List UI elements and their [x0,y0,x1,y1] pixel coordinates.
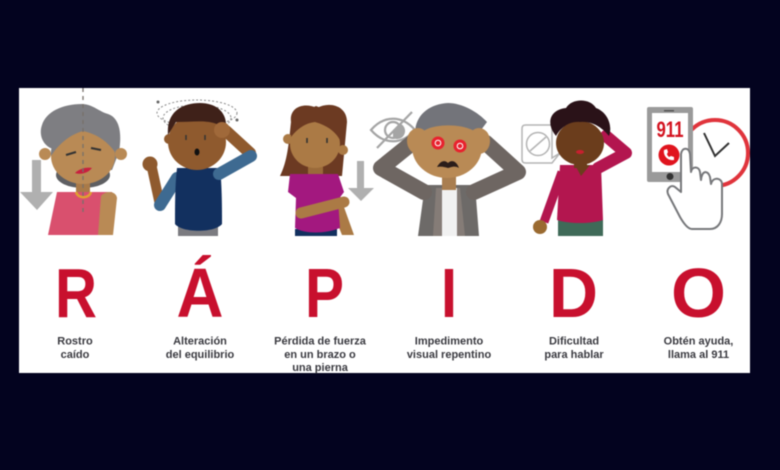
caption: Alteración del equilibrio: del equilibrio [166,349,235,361]
caption: Dificultad para hablar: para hablar [544,349,604,361]
icon: down arrow [348,161,374,201]
caption: Pérdida de fuerza: Pérdida de fuerza [274,336,367,348]
letter P: P [305,254,344,332]
letter D: D [549,254,598,332]
figure: woman with drooping face [20,104,127,235]
caption: Dificultad para hablar: Dificultad [549,336,599,348]
letter R: R [55,254,97,332]
figure: man with dizziness [142,100,251,236]
icon: phone, clock and hand calling 911 [647,107,748,229]
caption: Obtén ayuda: llama al 911 [668,349,729,361]
icon: down arrow [20,160,53,210]
white panel [19,88,750,373]
dashed symmetry line [82,88,84,215]
figure: woman with speech difficulty [522,100,626,236]
caption: Pérdida de fuerza: en un brazo o [284,349,356,361]
caption: Pérdida de fuerza: una pierna [292,362,349,374]
caption: Alteración del equilibrio: Alteración [173,336,227,348]
icon: pointing hand [668,149,722,229]
caption: Impedimento visual repentino: visual repentino [407,349,491,361]
letter Á: Á [176,254,224,332]
icon: crossed-out eye [371,112,415,148]
caption: Obtén ayuda: Obtén ayuda, [664,336,733,348]
icon: dizzy orbit [156,100,238,131]
caption: Impedimento visual repentino: Impedimento [415,336,484,348]
letter O: O [671,254,726,332]
figure: woman with weak arm [280,105,374,236]
figure: man with vision problem [371,103,518,236]
icon: clock [682,120,748,186]
caption: Rostro caído: caído [61,349,90,361]
caption: Rostro caído: Rostro [57,336,93,348]
letter I: I [441,254,457,332]
911 number: 911 [656,117,684,142]
icon: blocked speech bubble [522,125,560,163]
